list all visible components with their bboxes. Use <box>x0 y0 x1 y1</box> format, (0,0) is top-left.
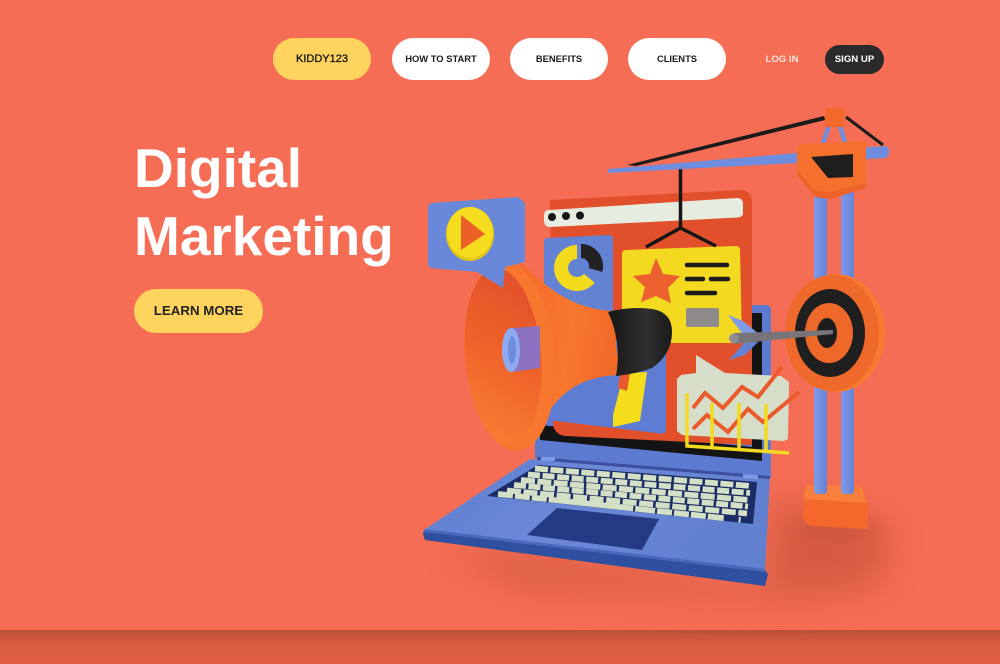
lower blue card <box>550 340 666 434</box>
chart lines <box>693 367 799 432</box>
megaphone <box>457 257 672 455</box>
crane columns <box>814 190 854 495</box>
icon: play button <box>446 207 494 261</box>
laptop screen <box>540 313 762 461</box>
navigation: benefits <box>510 38 608 80</box>
target <box>785 274 885 392</box>
crane top block <box>825 108 845 127</box>
megaphone rim <box>457 257 563 455</box>
icon: star <box>633 258 680 303</box>
video speech bubble <box>428 197 525 288</box>
megaphone handle <box>613 372 647 427</box>
megaphone inner cone <box>457 265 549 447</box>
megaphone black band <box>608 308 672 376</box>
navigation: clients <box>628 38 726 80</box>
bottom strip <box>0 630 1000 664</box>
navigation: brand pill: KIDDY123 <box>296 53 348 65</box>
button: learn more <box>134 289 263 333</box>
navigation: log in: LOG IN <box>765 54 799 65</box>
chart axes <box>687 393 789 453</box>
grey button <box>686 308 719 327</box>
crane mast struts <box>823 126 845 143</box>
ground shadow <box>440 500 890 600</box>
donut chart card <box>544 235 613 330</box>
navigation: clients: CLIENTS <box>657 53 697 64</box>
navigation: benefits: BENEFITS <box>536 53 582 64</box>
crane cab <box>797 141 866 199</box>
donut chart <box>561 251 596 284</box>
keyboard <box>487 465 757 524</box>
crane hanger cable <box>646 169 716 247</box>
navigation: how to start <box>392 38 490 80</box>
yellow card with star <box>622 246 742 343</box>
browser window panel <box>550 190 752 445</box>
button: learn more: LEARN MORE <box>154 303 243 318</box>
navigation: brand pill <box>273 38 371 80</box>
line chart card <box>677 355 799 453</box>
title: Digital <box>134 137 302 199</box>
crane boom <box>608 108 889 173</box>
laptop lid frame <box>535 305 771 478</box>
crane base <box>803 478 868 529</box>
navigation: sign up <box>825 45 884 74</box>
navigation: how to start: HOW TO START <box>405 53 477 64</box>
title: Marketing <box>134 205 394 267</box>
speaker driver <box>502 326 540 372</box>
browser address bar <box>544 198 743 227</box>
laptop base <box>423 457 770 586</box>
card text lines <box>687 265 728 293</box>
navigation: sign up: SIGN UP <box>835 54 874 65</box>
touchpad <box>527 508 659 550</box>
arrow <box>728 315 833 360</box>
title <box>134 137 394 267</box>
